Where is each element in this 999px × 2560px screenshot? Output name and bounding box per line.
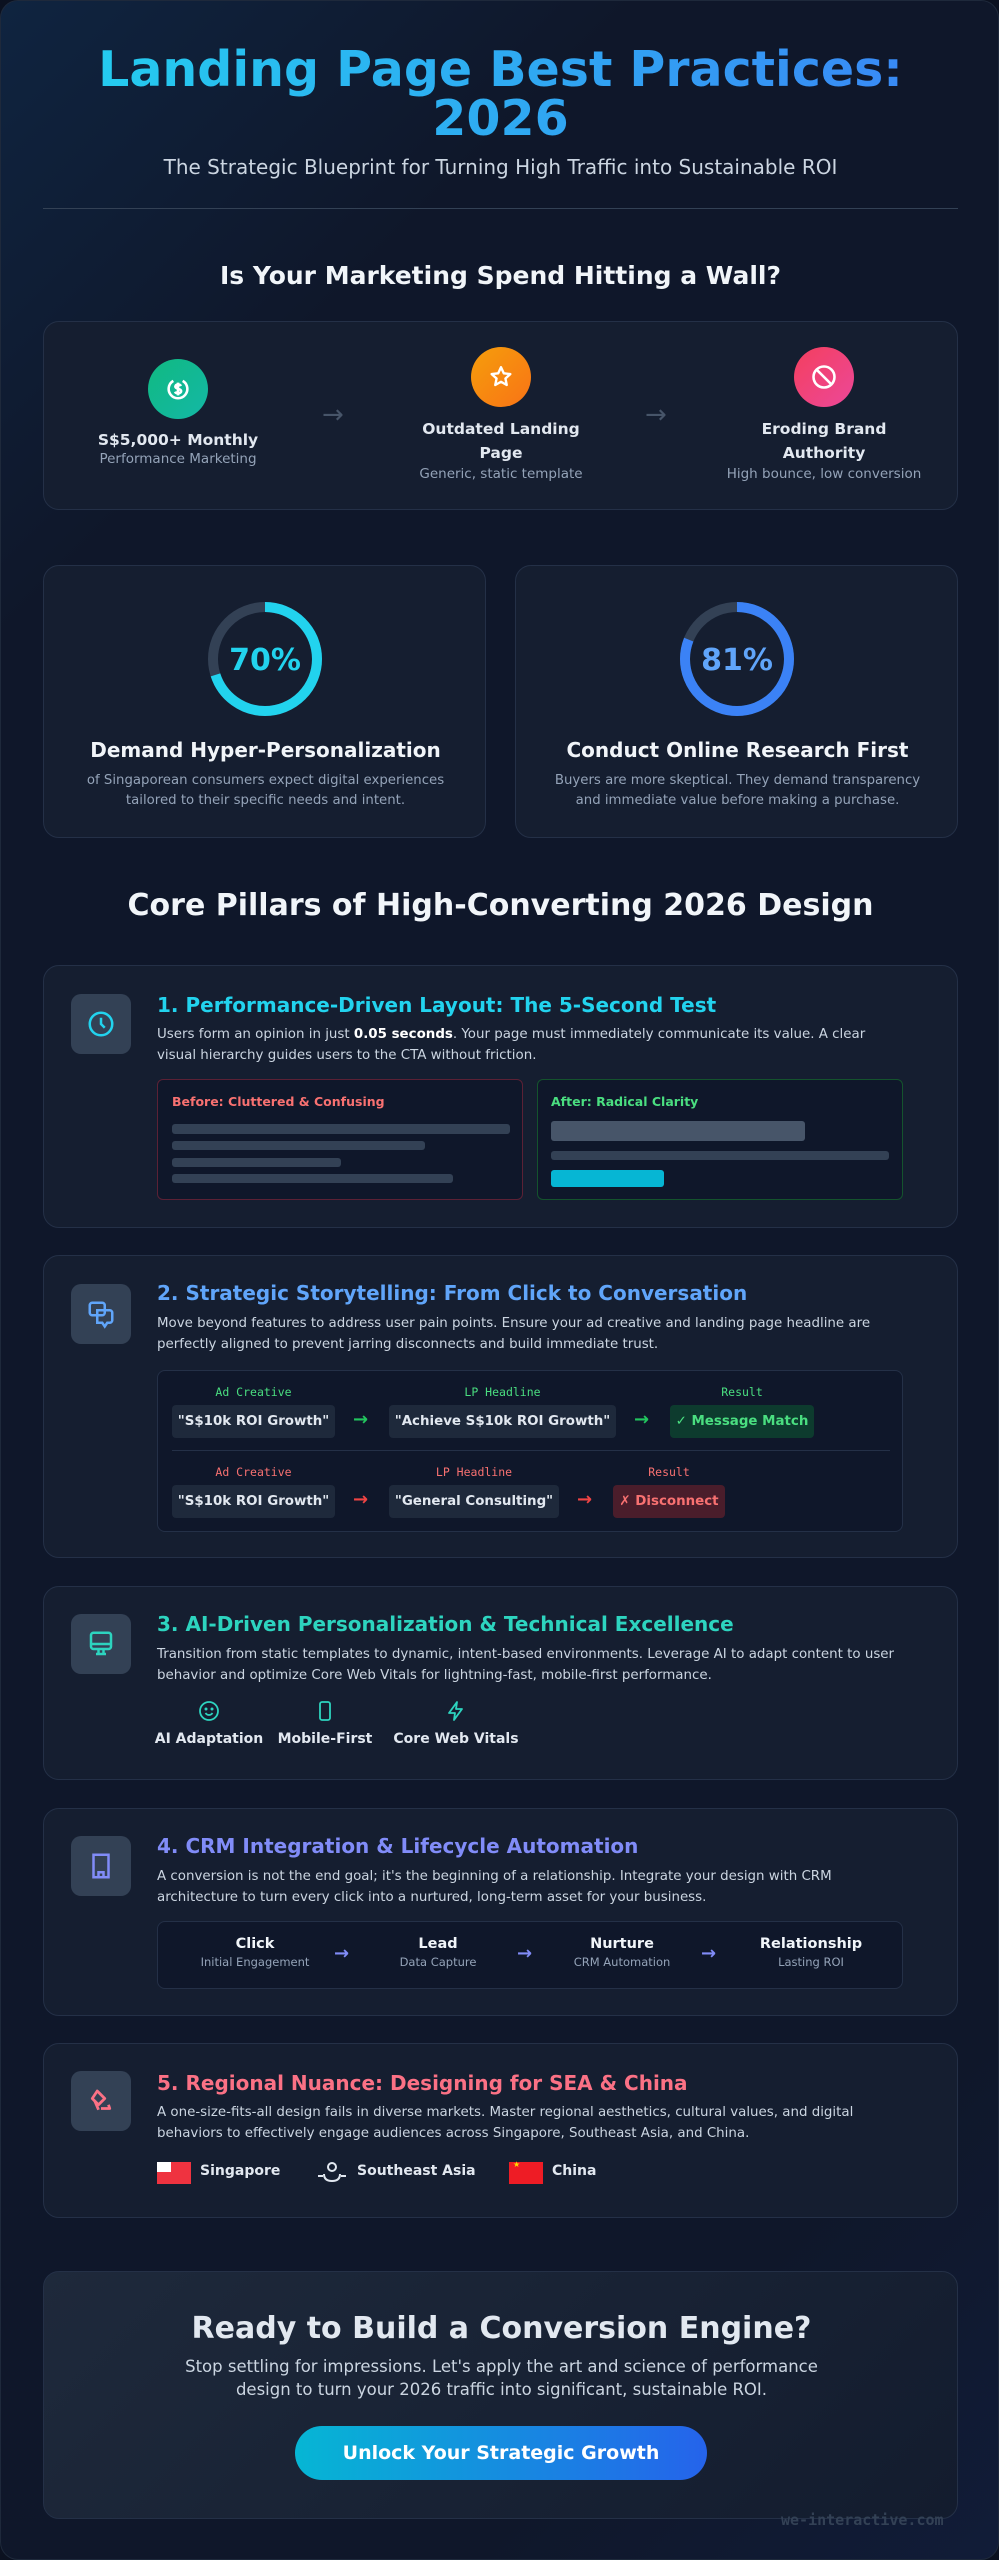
after box: After: Radical Clarity <box>551 1094 698 1109</box>
feature icons <box>154 1701 519 1747</box>
item: eroding authority: Eroding Brand <box>762 420 886 438</box>
CTA text: design to turn your 2026 traffic into significant, sustainable ROI. <box>236 2380 767 2399</box>
message match diagram: "S$10k ROI Growth" <box>178 1414 329 1429</box>
pillar 4: 4. CRM Integration & Lifecycle Automation <box>157 1834 638 1858</box>
lifecycle flow: Lead <box>418 1936 458 1952</box>
message match diagram: ✗ Disconnect <box>619 1494 719 1509</box>
item: eroding authority <box>727 347 921 482</box>
message match diagram: → <box>353 1489 368 1510</box>
regions: Singapore <box>200 2163 280 2179</box>
message match diagram: LP Headline <box>464 1385 541 1399</box>
flag: singapore <box>157 2162 191 2184</box>
message match diagram: Result <box>721 1385 763 1399</box>
item: outdated page <box>419 347 583 482</box>
flag: china: ★ <box>513 2160 520 2169</box>
heading: core pillars: Core Pillars of High-Converting 2026 Design <box>128 888 873 923</box>
pillar 4: A conversion is not the end goal; it's the beginning of a relationship. Integrate your design with CRM architecture to turn every click into a nurtured, long-term asset for your business. <box>157 1869 832 1905</box>
message match diagram: → <box>577 1489 592 1510</box>
icon: star <box>471 347 531 407</box>
flag: china <box>509 2162 543 2184</box>
message match diagram: Result <box>648 1465 690 1479</box>
message match diagram: → <box>353 1409 368 1430</box>
icon: southeast asia <box>318 2162 346 2182</box>
stat card: 81%: Conduct Online Research First <box>566 738 908 762</box>
lifecycle flow: Initial Engagement <box>201 1955 309 1969</box>
icon: ban <box>794 347 854 407</box>
item: outdated page: Generic, static template <box>419 466 583 482</box>
CTA text: Stop settling for impressions. Let's apply the art and science of performance <box>185 2357 818 2376</box>
item: monthly spend: S$5,000+ Monthly <box>98 431 258 449</box>
after box <box>537 1079 903 1200</box>
lifecycle flow: Lasting ROI <box>778 1955 844 1969</box>
pillar 5: A one-size-fits-all design fails in diverse markets. Master regional aesthetics, cultural values, and digital behaviors to effectively engage audiences across Singapore, Southeast Asia, and China. <box>157 2105 853 2141</box>
icon: dollar <box>148 359 208 419</box>
ring chart 70% <box>208 602 322 716</box>
lifecycle flow: → <box>701 1943 716 1964</box>
regions <box>157 2160 596 2184</box>
lifecycle flow: → <box>517 1943 532 1964</box>
pillar 1: Users form an opinion in just 0.05 seconds. Your page must immediately communicate its value. A clear visual hierarchy guides users to the CTA without friction. <box>157 1027 865 1063</box>
pillar 2: 2. Strategic Storytelling: From Click to Conversation <box>157 1281 747 1305</box>
icon: chat <box>71 1284 131 1344</box>
watermark: we-interactive.com <box>781 2511 944 2529</box>
ring chart 81% <box>680 602 794 716</box>
pillar 5: 5. Regional Nuance: Designing for SEA & China <box>157 2071 688 2095</box>
stat card: 81%: Buyers are more skeptical. They demand transparency <box>555 773 920 788</box>
lifecycle flow: Relationship <box>760 1936 862 1952</box>
stat card: 81%: and immediate value before making a purchase. <box>576 793 899 808</box>
CTA panel <box>43 2271 958 2519</box>
arrow: → <box>645 400 667 430</box>
item: eroding authority: Authority <box>783 444 865 462</box>
regions: Southeast Asia <box>357 2163 476 2179</box>
pillar 1: 1. Performance-Driven Layout: The 5-Second Test <box>157 993 716 1017</box>
stat card: 70% <box>43 565 486 838</box>
pillar 3: 3. AI-Driven Personalization & Technical Excellence <box>157 1612 734 1636</box>
row: match: Ad Creative <box>215 1385 292 1399</box>
CTA button <box>295 2426 707 2480</box>
icon: AI adaptation <box>154 1701 263 1747</box>
ring chart 70%: 70% <box>229 643 301 678</box>
before box: Before: Cluttered & Confusing <box>172 1094 385 1109</box>
icon: mobile <box>278 1701 372 1747</box>
pillar 3: Transition from static templates to dynamic, intent-based environments. Leverage AI to adapt content to user behavior and optimize Core Web Vitals for lightning-fast, mobile-first performance. <box>157 1647 894 1683</box>
lifecycle flow: CRM Automation <box>574 1955 670 1969</box>
title <box>1 45 999 143</box>
heading: marketing spend: Is Your Marketing Spend Hitting a Wall? <box>220 261 781 290</box>
pillar 1 <box>43 965 958 1228</box>
message match diagram: "Achieve S$10k ROI Growth" <box>395 1414 610 1429</box>
item: monthly spend <box>98 359 258 467</box>
pillar 2: Move beyond features to address user pain points. Ensure your ad creative and landing page headline are perfectly aligned to prevent jarring disconnects and build immediate trust. <box>157 1316 870 1352</box>
message match diagram <box>157 1370 903 1532</box>
item: eroding authority: High bounce, low conversion <box>727 466 921 482</box>
icon: bolt: Core Web Vitals <box>393 1731 519 1747</box>
CTA text <box>185 2357 818 2399</box>
lifecycle flow: → <box>334 1943 349 1964</box>
panel: spend flow <box>43 321 958 510</box>
item: outdated page: Page <box>479 444 522 462</box>
message match diagram: LP Headline <box>436 1465 512 1479</box>
stat card: 70%: Demand Hyper-Personalization <box>90 738 441 762</box>
arrow: → <box>322 400 344 430</box>
icon: bolt <box>393 1701 519 1747</box>
icon: paint <box>71 2071 131 2131</box>
message match diagram: → <box>634 1409 649 1430</box>
stat card: 70%: of Singaporean consumers expect digital experiences <box>87 773 444 788</box>
pillar 3 <box>43 1586 958 1780</box>
pillar 4 <box>43 1808 958 2016</box>
regions: China <box>552 2163 596 2179</box>
pillar 2 <box>43 1255 958 1558</box>
lifecycle flow <box>157 1921 903 1989</box>
icon: building <box>71 1836 131 1896</box>
pillar 5 <box>43 2043 958 2218</box>
icon: AI adaptation: AI Adaptation <box>155 1731 263 1747</box>
row: disconnect: Ad Creative <box>215 1465 292 1479</box>
CTA heading: Ready to Build a Conversion Engine? <box>192 2311 811 2346</box>
item: monthly spend: Performance Marketing <box>99 451 257 467</box>
lifecycle flow: Data Capture <box>400 1955 476 1969</box>
before box <box>157 1079 523 1200</box>
CTA button: Unlock Your Strategic Growth <box>343 2442 659 2464</box>
title: 2026 <box>432 90 569 147</box>
stat card: 81% <box>515 565 958 838</box>
stat card: 70%: tailored to their specific needs and intent. <box>126 793 405 808</box>
lifecycle flow: Nurture <box>590 1936 654 1952</box>
lifecycle flow: Click <box>236 1936 274 1952</box>
message match diagram: ✓ Message Match <box>676 1414 808 1429</box>
icon: clock <box>71 994 131 1054</box>
message match diagram: "S$10k ROI Growth" <box>178 1494 329 1509</box>
message match diagram: "General Consulting" <box>395 1494 553 1509</box>
title: Landing Page Best Practices: <box>98 41 903 98</box>
ring chart 81%: 81% <box>701 643 773 678</box>
subtitle: The Strategic Blueprint for Turning High Traffic into Sustainable ROI <box>164 155 837 179</box>
item: outdated page: Outdated Landing <box>422 420 580 438</box>
icon: mobile: Mobile-First <box>278 1731 372 1747</box>
icon: monitor <box>71 1614 131 1674</box>
